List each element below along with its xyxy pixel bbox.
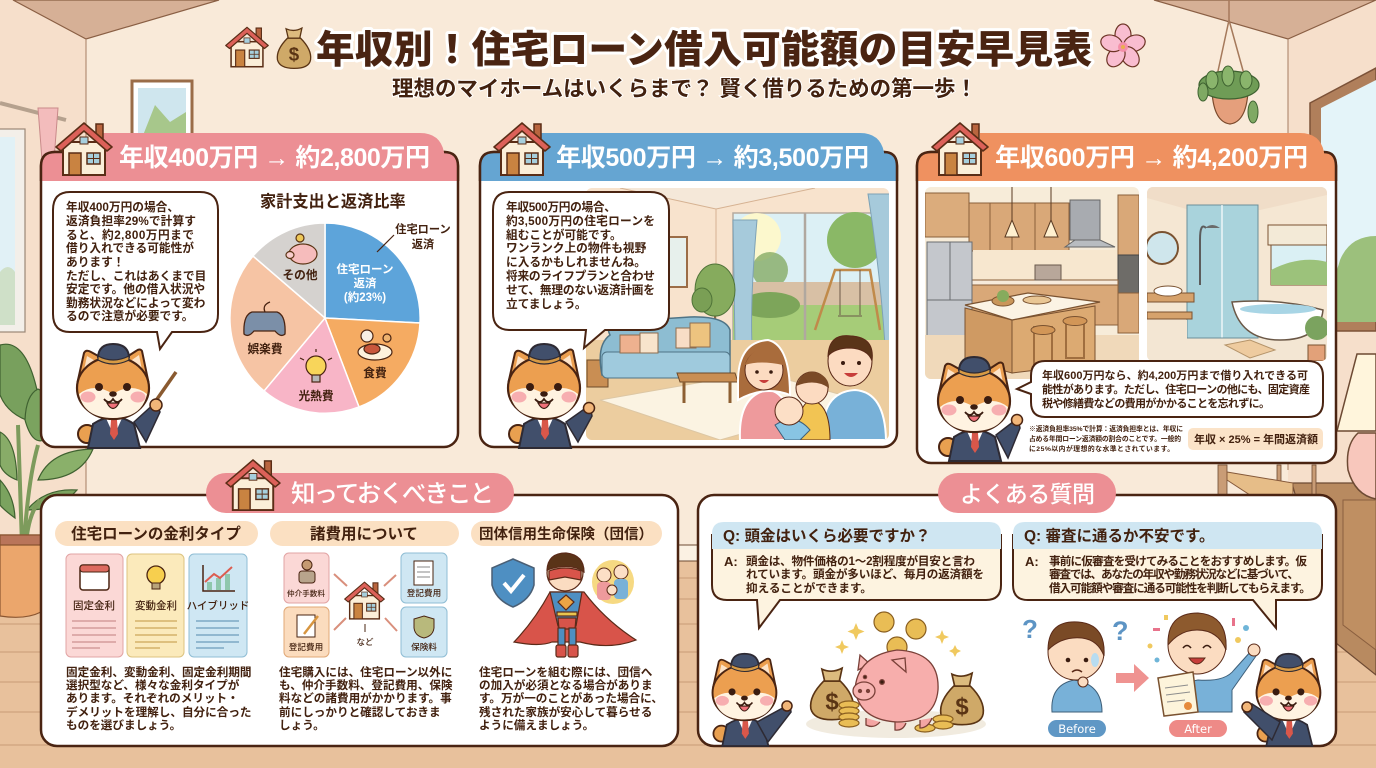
illustration: piggy bank and money bbox=[806, 612, 986, 738]
card: 仲介手数料: 仲介手数料 bbox=[287, 588, 325, 598]
answer bubble bbox=[712, 535, 1001, 628]
panel: 年収400万円 bbox=[41, 123, 458, 448]
mascot: shiba with pointer bbox=[77, 344, 176, 448]
bubble text: ワンランク上の物件も視野 bbox=[506, 241, 647, 255]
body text: 住宅購入には、住宅ローン以外に bbox=[279, 665, 452, 679]
bubble text: 立てましょう。 bbox=[506, 297, 587, 311]
side table bbox=[587, 360, 608, 387]
bubble text: ると、約2,800万円まで bbox=[66, 228, 194, 242]
decor: hanging plant bbox=[1198, 0, 1259, 124]
illustration: living room with family bbox=[586, 188, 890, 440]
panel: よくある質問 bbox=[698, 473, 1336, 746]
bubble text: ただし、これはあくまで目 bbox=[66, 270, 206, 283]
faq 2: 事前に仮審査を受けてみることをおすすめします。仮 bbox=[1049, 554, 1307, 568]
body text: デメリットを理解し、自分に合った bbox=[66, 705, 252, 719]
body text: ものを選びましょう。 bbox=[66, 718, 181, 732]
body text bbox=[479, 665, 663, 732]
bubble text: るので注意が必要です。 bbox=[66, 309, 193, 323]
decor: table lamp and cabinet right bbox=[1218, 354, 1376, 675]
bubble text: 税や修繕費などの費用がかかることを忘れずに。 bbox=[1042, 396, 1270, 410]
card: 登記費用 bbox=[401, 553, 447, 603]
bubble text bbox=[1042, 368, 1310, 410]
panel: 知っておくべきこと bbox=[41, 460, 678, 746]
faq 2: 借入可能額や審査に通る可能性を判断してもらえます。 bbox=[1049, 581, 1311, 595]
bubble text: あります！ bbox=[66, 256, 124, 269]
formula badge bbox=[1188, 428, 1323, 450]
bubble text: 安定です。他の借入状況や bbox=[66, 282, 205, 296]
boy bbox=[798, 400, 830, 440]
subtitle: 理想のマイホームはいくらまで？ 賢く借りるための第一歩！ bbox=[392, 77, 977, 101]
header text: 年収400万円 → 約2,800万円 bbox=[119, 144, 430, 172]
faq 2: 審査では、あなたの年収や勤務状況などに基づいて、 bbox=[1049, 567, 1299, 581]
formula badge: 年収 × 25% = 年間返済額 bbox=[1194, 432, 1318, 446]
speech bubble bbox=[53, 192, 218, 349]
card: 仲介手数料 bbox=[284, 553, 329, 603]
card: 固定金利: 固定金利 bbox=[73, 599, 115, 612]
pie labels and icons: 住宅ローン bbox=[395, 222, 451, 236]
panel: 年収600万円 bbox=[917, 123, 1336, 463]
illustration: before person: ? bbox=[1022, 614, 1038, 644]
body text: 住宅ローンを組む際には、団信へ bbox=[479, 665, 653, 679]
pie labels and icons: 光熱費 bbox=[298, 389, 334, 403]
illustration: bathroom bbox=[1146, 187, 1329, 361]
window bbox=[733, 213, 890, 345]
icon: house bbox=[932, 123, 988, 175]
body text: も、仲介手数料、登記費用、保険 bbox=[279, 678, 453, 692]
bubble text: 勤務状況などによって変わ bbox=[66, 296, 206, 310]
floor bbox=[586, 340, 889, 440]
decor: left window and curtain bbox=[0, 103, 66, 332]
coffee table bbox=[677, 373, 738, 382]
icon: game controller bbox=[244, 302, 285, 335]
center house and arrows: など bbox=[356, 637, 374, 647]
card: 変動金利: 変動金利 bbox=[135, 599, 177, 612]
mascot: shiba left bbox=[713, 654, 792, 746]
father bbox=[823, 390, 886, 440]
label: after bbox=[1169, 720, 1227, 737]
column: 諸費用: 諸費用について bbox=[310, 525, 418, 543]
header text: 年収600万円 → 約4,200万円 bbox=[995, 144, 1308, 172]
body text bbox=[279, 665, 453, 732]
answer bubble bbox=[1013, 535, 1322, 628]
bubble text: 約3,500万円の住宅ローンを bbox=[506, 214, 655, 228]
icon: house bbox=[494, 123, 550, 175]
curtains bbox=[733, 220, 757, 345]
icon: house bbox=[56, 123, 112, 175]
body text: 残された家族が安心して暮らせる bbox=[479, 705, 652, 719]
bubble text: 借り入れできる可能性が bbox=[66, 241, 194, 255]
icon: money bag bbox=[277, 28, 311, 68]
faq 1: A: bbox=[724, 554, 738, 569]
icon: light bulb bbox=[300, 349, 332, 382]
pie labels and icons: その他 bbox=[282, 268, 318, 282]
body text: しょう。 bbox=[279, 719, 325, 732]
card: 印紙代 bbox=[284, 607, 329, 657]
pie labels and icons: 食費 bbox=[363, 366, 387, 380]
pie labels and icons: 住宅ローン bbox=[337, 262, 393, 276]
icon: shield bbox=[492, 559, 534, 607]
illustration: after person bbox=[1148, 613, 1260, 716]
illustration: kitchen bbox=[925, 187, 1139, 379]
bubble text: 年収600万円なら、約4,200万円まで借り入れできる可 bbox=[1042, 368, 1308, 382]
illustration: before person: ? bbox=[1112, 616, 1128, 646]
footnote text: に25%以内が理想的な水準とされています。 bbox=[1029, 444, 1174, 453]
column: 金利タイプ: 住宅ローンの金利タイプ bbox=[71, 524, 241, 543]
mascot: shiba right bbox=[1242, 654, 1320, 746]
section tab bbox=[206, 460, 514, 513]
illustration: before person bbox=[1022, 614, 1128, 712]
bubble text: 年収400万円の場合、 bbox=[66, 200, 179, 214]
mother bbox=[738, 392, 784, 440]
pie chart title: 家計支出と返済比率 bbox=[260, 192, 406, 211]
faq 1: れています。頭金が多いほど、毎月の返済額を bbox=[746, 567, 984, 581]
footnote text bbox=[1029, 424, 1183, 453]
bubble text bbox=[506, 200, 655, 311]
header band bbox=[480, 133, 897, 181]
decor: right window bbox=[1310, 68, 1376, 331]
footnote text: ※返済負担率35%で計算：返済負担率とは、年収に bbox=[1029, 424, 1183, 433]
question band bbox=[1013, 522, 1322, 549]
decor: wall picture bbox=[132, 81, 192, 151]
mascot: shiba waving bbox=[508, 344, 594, 448]
faq 1: 頭金は、物件価格の1〜2割程度が目安と言わ bbox=[746, 554, 975, 568]
bubble text: せて、無理のない返済計画を bbox=[506, 283, 655, 297]
faq 1: Q: 頭金はいくら必要ですか？ bbox=[723, 526, 931, 545]
section tab: よくある質問 bbox=[960, 481, 1095, 507]
bubble text: 能性があります。ただし、住宅ローンの他にも、固定資産 bbox=[1042, 382, 1310, 396]
body text: 選択型など、様々な金利タイプが bbox=[66, 678, 240, 692]
baby bbox=[775, 420, 810, 440]
column: 諸費用 bbox=[270, 521, 459, 732]
pie labels and icons: (約23%) bbox=[344, 290, 386, 304]
sofa bbox=[600, 317, 730, 375]
column: 団信 bbox=[471, 521, 663, 732]
card: ハイブリッド bbox=[187, 554, 249, 657]
pie labels and icons bbox=[244, 222, 451, 403]
header band bbox=[917, 133, 1336, 181]
body text: す。万が一のことがあった場合に、 bbox=[479, 691, 663, 705]
panel: 年収500万円 bbox=[480, 123, 897, 448]
title bbox=[226, 24, 1147, 72]
label: before: Before bbox=[1058, 722, 1096, 736]
footnote text: 占める年間ローン返済額の割合のことです。一般的 bbox=[1029, 434, 1181, 443]
card: 登記費用: 登記費用 bbox=[407, 587, 441, 598]
icon: piggy bank bbox=[286, 234, 317, 264]
card: 固定金利 bbox=[66, 554, 123, 657]
certificate bbox=[1158, 672, 1198, 716]
plant bbox=[714, 316, 716, 318]
question band bbox=[712, 522, 1001, 549]
pie labels and icons: 返済 bbox=[354, 276, 377, 290]
body text: あります。それぞれのメリット・ bbox=[66, 692, 239, 705]
label: before bbox=[1048, 720, 1106, 737]
card: 印紙代: 登記費用 bbox=[289, 641, 323, 652]
icon: house bbox=[226, 27, 268, 67]
speech bubble bbox=[1017, 361, 1323, 417]
label: after: After bbox=[1184, 722, 1212, 736]
sparkles bbox=[835, 623, 961, 657]
body text: 料などの諸費用がかかります。事 bbox=[279, 691, 452, 705]
confetti bbox=[1148, 615, 1249, 662]
pie chart bbox=[230, 223, 420, 413]
bubble text: 将来のライフプランと合わせ bbox=[506, 269, 655, 283]
faq 1 bbox=[712, 522, 1001, 628]
faq 2: A: bbox=[1025, 554, 1039, 569]
decor: potted plant left bbox=[0, 344, 93, 617]
family circle bbox=[592, 560, 634, 604]
faq 2 bbox=[1013, 522, 1322, 628]
superhero bbox=[514, 553, 636, 657]
faq 1: 抑えることができます。 bbox=[746, 581, 872, 595]
bubble text: に入るかもしれませんね。 bbox=[506, 256, 646, 269]
body text bbox=[66, 665, 252, 732]
bubble text: 返済負担率29%で計算す bbox=[66, 214, 196, 228]
body text: 固定金利、変動金利、固定金利期間 bbox=[66, 665, 252, 679]
mascot: shiba waving bbox=[938, 357, 1022, 461]
card: 保険料 bbox=[401, 607, 447, 657]
section tab bbox=[938, 473, 1116, 513]
faq 2: Q: 審査に通るか不安です。 bbox=[1024, 526, 1214, 545]
pig bbox=[853, 650, 938, 730]
card: 保険料: 保険料 bbox=[411, 641, 437, 652]
title text: 年収別！住宅ローン借入可能額の目安早見表 bbox=[316, 29, 1092, 72]
body text: 前にしっかりと確認しておきま bbox=[279, 705, 441, 719]
column: 金利タイプ bbox=[55, 521, 258, 732]
icon: curry plate bbox=[358, 330, 392, 360]
arrow: before to after bbox=[1116, 664, 1149, 692]
column: 団信: 団体信用生命保険（団信） bbox=[479, 525, 653, 543]
speech bubble bbox=[493, 192, 669, 348]
header band bbox=[41, 133, 458, 181]
section tab: 知っておくべきこと bbox=[291, 480, 494, 508]
header text: 年収500万円 → 約3,500万円 bbox=[556, 144, 869, 172]
body text: ように備えましょう。 bbox=[479, 718, 594, 732]
bubble text bbox=[66, 200, 206, 323]
center house and arrows bbox=[334, 574, 397, 647]
pie labels and icons: 返済 bbox=[412, 237, 434, 251]
icon: sakura flower bbox=[1099, 24, 1147, 70]
card: ハイブリッド: ハイブリッド bbox=[187, 599, 249, 612]
bubble text: 組むことが可能です。 bbox=[506, 228, 622, 242]
coins bbox=[839, 612, 953, 732]
body text: の加入が必須となる場合がありま bbox=[479, 678, 653, 692]
card: 変動金利 bbox=[127, 554, 184, 657]
pie labels and icons: 娯楽費 bbox=[247, 342, 283, 356]
bubble text: 年収500万円の場合、 bbox=[506, 200, 616, 214]
